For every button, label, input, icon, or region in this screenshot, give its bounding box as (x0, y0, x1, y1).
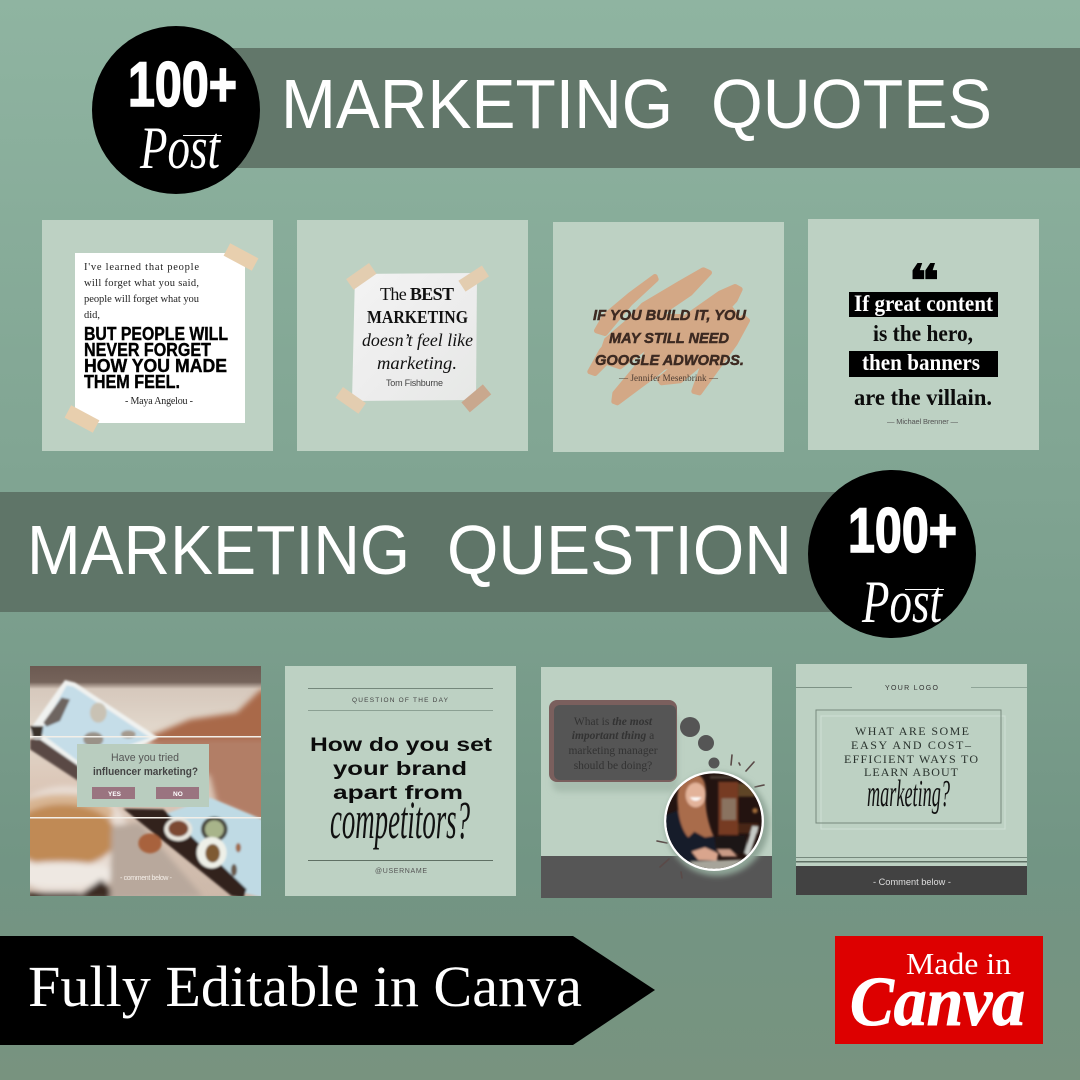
icon: accent ticks (657, 755, 764, 878)
quote text: THEM FEEL. (84, 372, 180, 392)
icon: tape top right (224, 243, 258, 271)
icon: brush scribble (590, 270, 747, 403)
quote text: If great content (854, 291, 993, 316)
question text: EFFICIENT WAYS TO (844, 752, 978, 766)
panel: question card 1 photo (30, 666, 261, 896)
panel: question card 3 (541, 667, 772, 898)
quote text: I've learned that people (84, 262, 199, 273)
badge: 100+ post middle (808, 470, 976, 638)
callout: poll box: NO (173, 791, 183, 798)
photo: woman portrait (662, 770, 769, 876)
panel: question card 2 (285, 666, 516, 896)
quote text: NEVER FORGET (84, 340, 211, 360)
panel: question card 2: competitors? (330, 790, 470, 850)
badge: 100+ post top (92, 26, 260, 194)
banner arrow: fully editable in canva: Fully Editable in Canva (28, 954, 582, 1019)
quote text: people will forget what you (84, 294, 200, 305)
question text: WHAT ARE SOME (855, 724, 969, 738)
badge: 100+ post top: 100+ (128, 50, 237, 120)
heading: marketing question (27, 511, 792, 589)
quote text: — Michael Brenner — (887, 417, 958, 426)
heading: marketing quotes: QUOTES (711, 65, 992, 143)
heading: marketing quotes (281, 65, 992, 143)
question text: How do you set (310, 735, 493, 756)
banner arrow: fully editable in canva (0, 936, 655, 1045)
icon: thought dots (680, 717, 720, 768)
badge: 100+ post middle: 100+ (848, 496, 957, 566)
badge: made in canva (835, 936, 1043, 1044)
text: comment below: - Comment below - (873, 877, 951, 888)
quote text: doesn’t feel like (362, 330, 473, 350)
badge: made in canva: Canva (850, 964, 1025, 1041)
heading: marketing quotes: MARKETING (281, 65, 673, 143)
icon: quotation mark: ❝ (908, 254, 940, 308)
quote text: MAY STILL NEED (609, 330, 729, 347)
badge: 100+ post top: Post (139, 115, 221, 181)
banner: marketing quotes (230, 48, 1080, 168)
callout: speech bubble: important thing a (572, 730, 654, 742)
quote text (362, 284, 473, 388)
callout: speech bubble (549, 700, 678, 792)
question text (844, 724, 978, 779)
question text: LEARN ABOUT (864, 765, 959, 779)
question text: your brand (333, 759, 467, 780)
panel: question card 4: marketing? (867, 773, 950, 815)
callout: speech bubble: should be doing? (574, 760, 652, 772)
panel: quote card 3: — Jennifer Mesenbrink — (618, 373, 719, 383)
quote text (593, 307, 747, 369)
icon: tape bottom left (65, 405, 99, 433)
text: comment below: - comment below - (120, 875, 173, 882)
panel: quote card 2 (297, 220, 528, 451)
quote text: did, (84, 310, 100, 321)
question text: EASY AND COST– (851, 738, 972, 752)
callout: poll box: Have you tried (111, 752, 179, 764)
panel: quote card 1 (42, 220, 273, 451)
quote text: then banners (862, 350, 980, 375)
question text (310, 735, 493, 804)
text: question of the day: QUESTION OF THE DAY (352, 697, 449, 704)
callout: speech bubble: marketing manager (568, 745, 658, 757)
question text: apart from (333, 783, 463, 804)
quote text: GOOGLE ADWORDS. (595, 352, 744, 369)
quote text: The BEST (380, 284, 454, 304)
banner: marketing question (0, 492, 840, 612)
panel: quote card 4 (808, 219, 1039, 450)
callout: speech bubble: What is the most (574, 716, 653, 728)
callout: poll box: influencer marketing? (93, 766, 198, 778)
quote text: MARKETING (367, 307, 468, 327)
text: your logo: YOUR LOGO (885, 685, 939, 692)
quote text: IF YOU BUILD IT, YOU (593, 307, 747, 324)
frame (816, 710, 1005, 829)
text: username: @USERNAME (375, 868, 427, 875)
badge: 100+ post middle: Post (861, 569, 943, 635)
quote text (84, 262, 228, 407)
quote text: BUT PEOPLE WILL (84, 324, 228, 344)
callout: poll box: YES (108, 791, 122, 798)
badge: made in canva: Made in (906, 946, 1012, 981)
quote text: are the villain. (854, 385, 992, 410)
quote text: will forget what you said, (84, 278, 199, 289)
quote text: is the hero, (873, 321, 973, 346)
heading: marketing question: MARKETING (27, 511, 410, 589)
panel: question card 4 (796, 664, 1027, 895)
panel: quote card 3 (553, 222, 784, 452)
icon: four tapes (336, 263, 491, 414)
quote text: HOW YOU MADE (84, 356, 227, 376)
callout: poll box (77, 744, 209, 807)
quote text: - Maya Angelou - (125, 396, 193, 407)
quote text: marketing. (377, 353, 457, 373)
quote text: Tom Fishburne (386, 378, 443, 388)
heading: marketing question: QUESTION (447, 511, 792, 589)
quote text (849, 291, 998, 426)
